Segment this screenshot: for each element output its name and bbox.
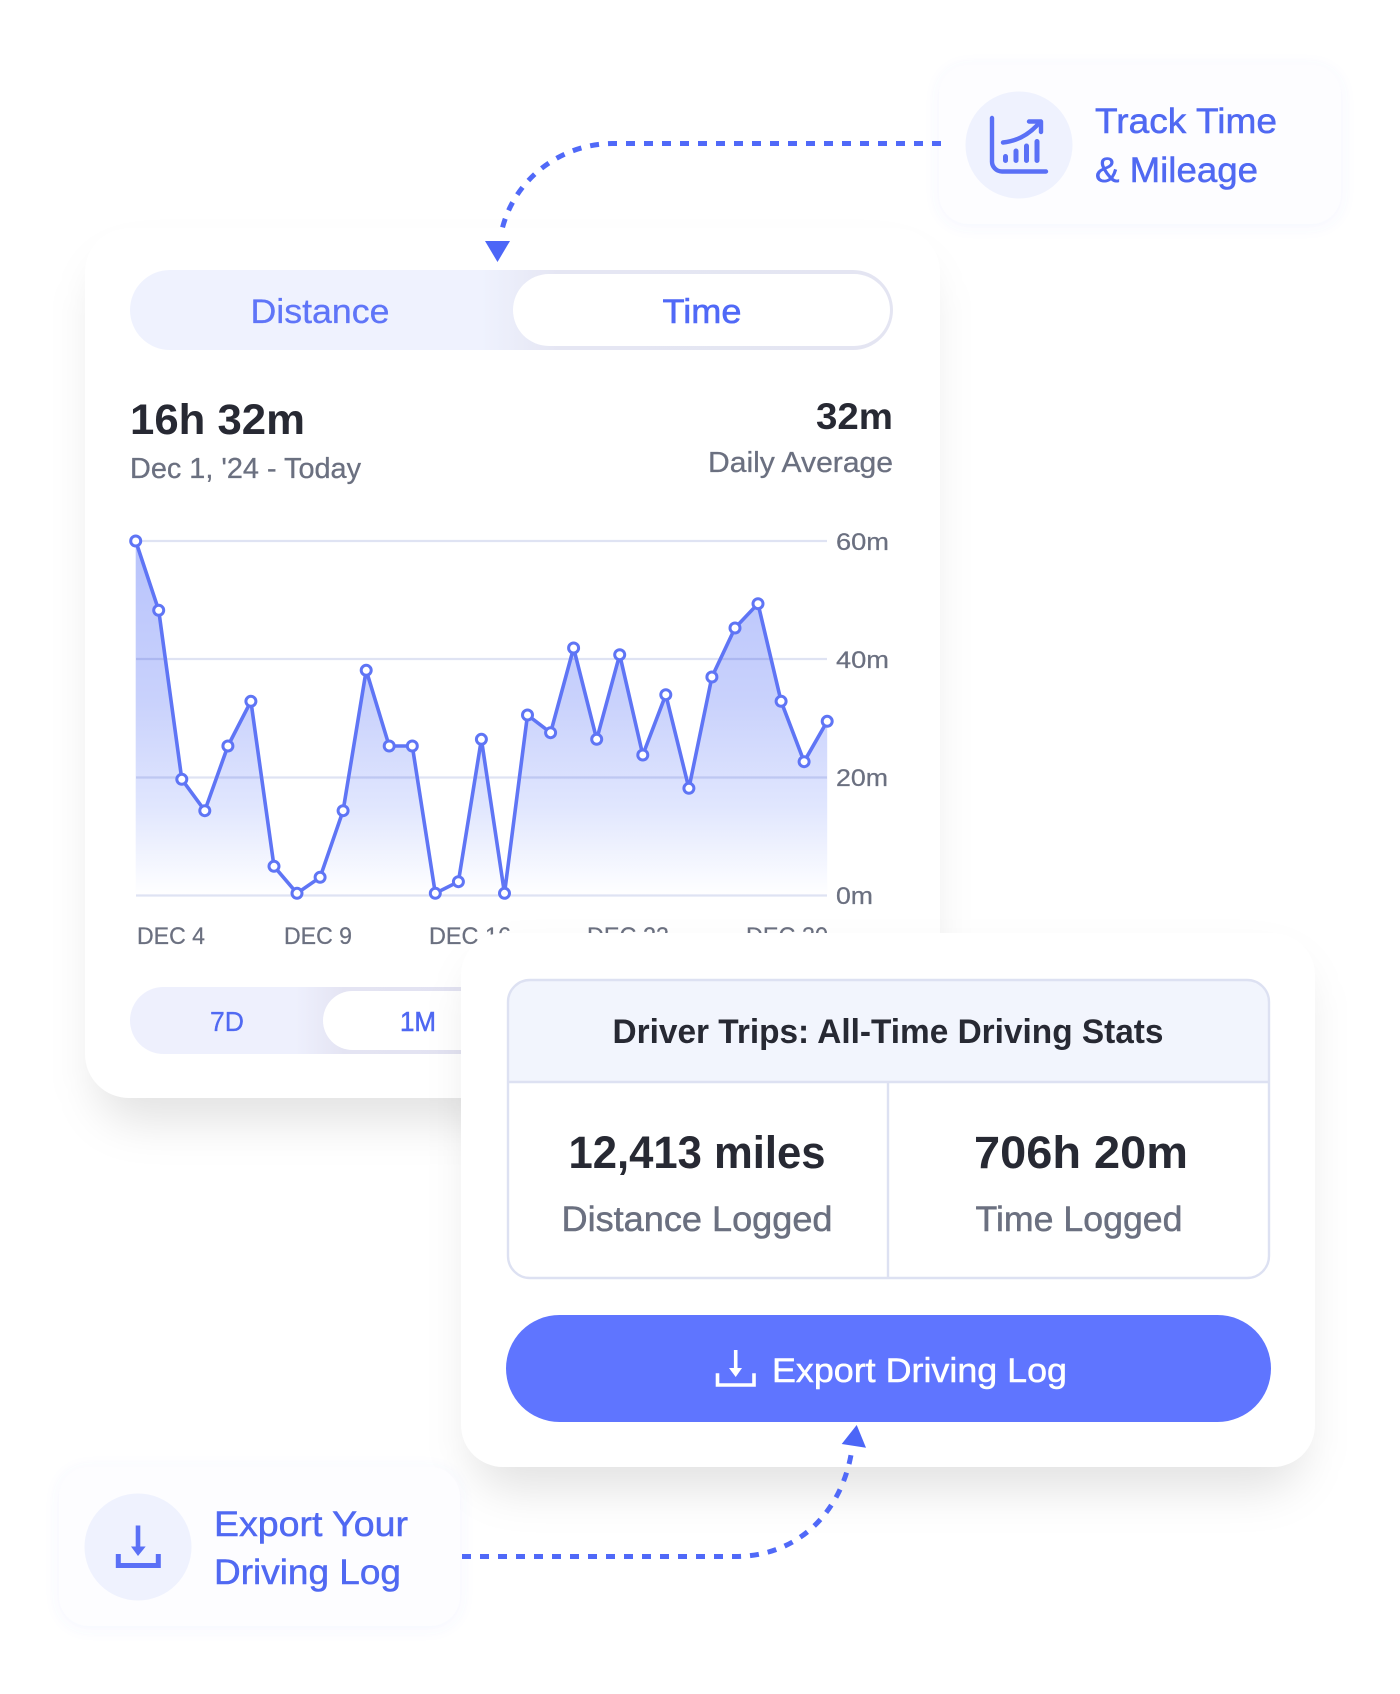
daily average stat xyxy=(708,396,893,479)
export button xyxy=(506,1315,1271,1422)
callout: track time and mileage: & Mileage xyxy=(1095,151,1258,190)
icon: download white xyxy=(718,1350,754,1385)
arrow: callout to time toggle xyxy=(485,144,941,262)
x axis labels xyxy=(137,923,828,950)
toggle: range: 1M xyxy=(400,1006,436,1037)
total time stat: 16h 32m xyxy=(130,396,305,444)
y axis labels: 20m xyxy=(836,765,888,792)
icon: download xyxy=(84,1494,192,1600)
stat: time logged: Time Logged xyxy=(976,1200,1182,1239)
stat: distance logged: Distance Logged xyxy=(562,1200,832,1239)
y axis labels xyxy=(836,529,889,910)
x axis labels: DEC 30 xyxy=(746,923,828,950)
callout: export your driving log: Driving Log xyxy=(214,1553,401,1592)
export button: Export Driving Log xyxy=(772,1352,1067,1390)
y axis labels: 0m xyxy=(836,883,873,910)
toggle: range xyxy=(130,987,530,1054)
y axis labels: 40m xyxy=(836,647,889,674)
callout: track time and mileage xyxy=(939,65,1341,224)
icon: growth chart xyxy=(966,92,1072,198)
panel: all-time driving stats xyxy=(461,933,1315,1490)
toggle: range: 7D xyxy=(210,1006,244,1037)
callout: export your driving log xyxy=(59,1467,460,1626)
stats table xyxy=(508,980,1269,1278)
x axis labels: DEC 16 xyxy=(429,923,511,950)
chart area fill xyxy=(136,541,827,896)
total time stat: Dec 1, '24 - Today xyxy=(130,453,361,485)
toggle: distance / time xyxy=(130,270,893,350)
toggle: distance / time: Time xyxy=(662,293,742,331)
stat: distance logged xyxy=(562,1127,832,1239)
y axis labels: 60m xyxy=(836,529,889,556)
x axis labels: DEC 23 xyxy=(587,923,669,950)
chart line xyxy=(136,541,827,893)
table heading: Driver Trips: All-Time Driving Stats xyxy=(612,1013,1164,1051)
x axis labels: DEC 4 xyxy=(137,923,205,950)
area line chart xyxy=(131,529,889,950)
callout: export your driving log: Export Your xyxy=(214,1505,408,1544)
callout: track time and mileage: Track Time xyxy=(1095,102,1277,141)
x axis labels: DEC 9 xyxy=(284,923,352,950)
daily average stat: 32m xyxy=(816,396,893,437)
stat: time logged: 706h 20m xyxy=(974,1127,1188,1178)
chart markers xyxy=(131,536,832,898)
stat: time logged xyxy=(974,1127,1188,1239)
daily average stat: Daily Average xyxy=(708,447,893,479)
panel: driving chart card xyxy=(85,228,940,1122)
toggle: distance / time: Distance xyxy=(250,293,390,331)
stat: distance logged: 12,413 miles xyxy=(568,1127,826,1178)
arrow: callout to export button xyxy=(462,1425,866,1556)
total time stat xyxy=(130,396,361,485)
